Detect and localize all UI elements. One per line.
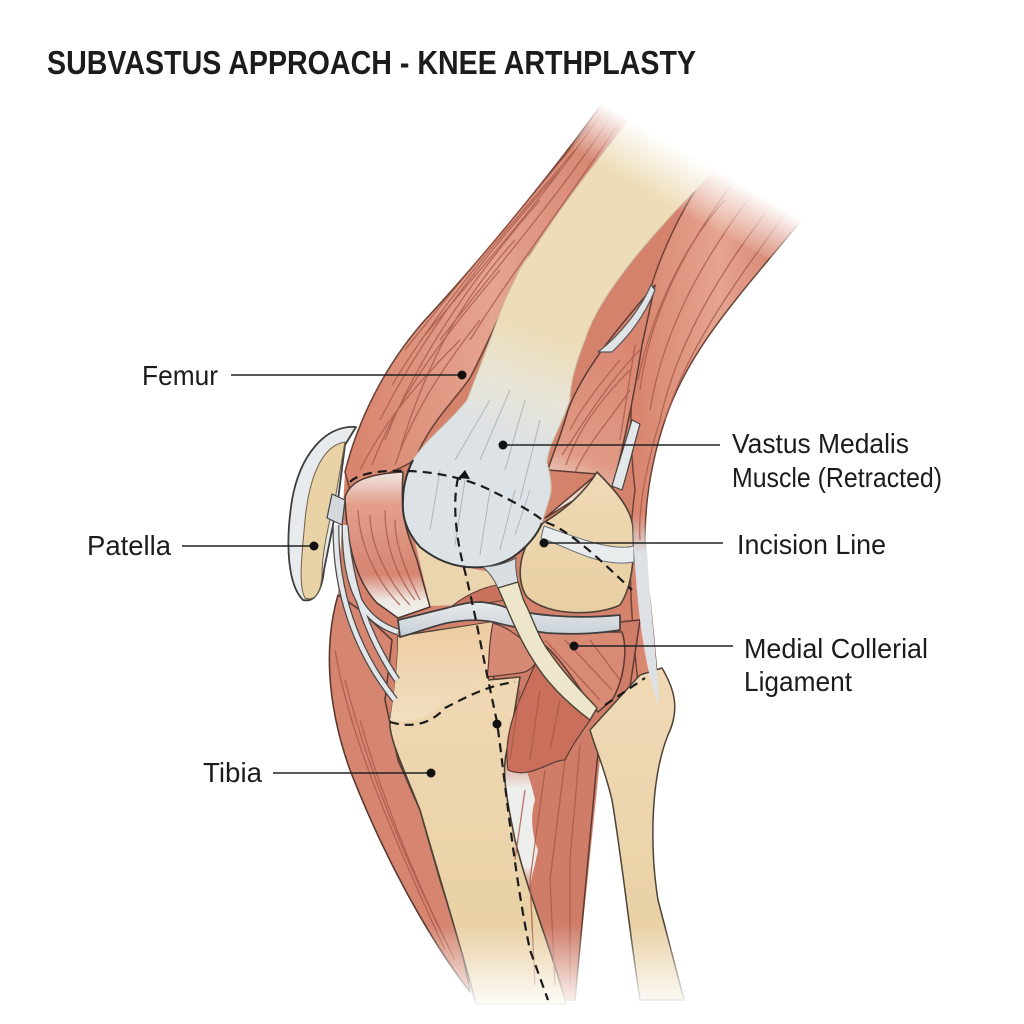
cartilage of condyle	[541, 526, 634, 563]
label: Femur: Femur	[142, 360, 218, 391]
incision arrow	[458, 470, 470, 479]
back leg muscles lower	[490, 620, 640, 1000]
label: Femur	[142, 360, 466, 391]
muscle lower center	[507, 660, 590, 773]
label: Vastus Medalis Muscle (Retracted): Muscle (Retracted)	[732, 462, 942, 493]
leg silhouette backing	[329, 95, 808, 1000]
label: Medial Collerial Ligament: Medial Collerial	[744, 633, 928, 664]
label: Tibia: Tibia	[203, 757, 262, 788]
label: Vastus Medalis Muscle (Retracted)	[498, 428, 942, 493]
bottom fade	[300, 925, 720, 1010]
muscle: tibial wedge	[487, 623, 537, 677]
lateral femoral condyle	[520, 472, 633, 613]
muscle: popliteal	[530, 632, 625, 712]
femoral fibres	[430, 390, 540, 555]
popliteal notch	[452, 585, 520, 606]
ligament fan	[483, 558, 518, 588]
muscle fibres	[335, 115, 790, 985]
right white tendon	[632, 515, 658, 705]
femur condyle lower outline	[403, 460, 542, 567]
white tendon strands	[336, 525, 398, 700]
tibia incision dot	[492, 720, 502, 728]
tendon: rear white strip	[612, 420, 640, 490]
incision line	[350, 471, 645, 1000]
patellar tendon wrap	[327, 494, 345, 525]
label: Incision Line	[540, 529, 886, 560]
muscle: patellar block	[345, 472, 430, 618]
label: Vastus Medalis Muscle (Retracted): Vastus Medalis	[732, 428, 909, 459]
patella outer cap	[288, 427, 356, 600]
tibia	[390, 622, 566, 1004]
meniscus band	[398, 602, 620, 637]
bone behind patellar muscle	[410, 520, 522, 606]
calf tendon white section	[503, 735, 538, 910]
label: Medial Collerial Ligament	[570, 633, 928, 697]
label: Tibia	[203, 757, 436, 788]
tendon: upper white strip	[598, 285, 655, 352]
label: Patella	[87, 530, 318, 561]
muscle: vastus medialis retracted	[545, 285, 655, 518]
fibula	[590, 668, 684, 1000]
label: Medial Collerial Ligament: Ligament	[744, 666, 852, 697]
top fade	[550, 60, 830, 270]
knee anatomy illustration	[288, 60, 830, 1010]
muscle: outer posterior thigh	[630, 160, 808, 705]
title: SUBVASTUS APPROACH - KNEE ARTHPLASTY	[47, 44, 696, 81]
muscle: anterior thigh quadriceps	[345, 95, 640, 490]
cream ligament	[498, 582, 597, 720]
lateral calf muscle	[329, 595, 470, 992]
label: Patella: Patella	[87, 530, 171, 561]
label: Incision Line: Incision Line	[737, 529, 886, 560]
femur with condyle	[403, 106, 720, 567]
patella bone	[301, 442, 345, 599]
tibial plateau	[390, 622, 493, 721]
patella	[288, 427, 356, 600]
